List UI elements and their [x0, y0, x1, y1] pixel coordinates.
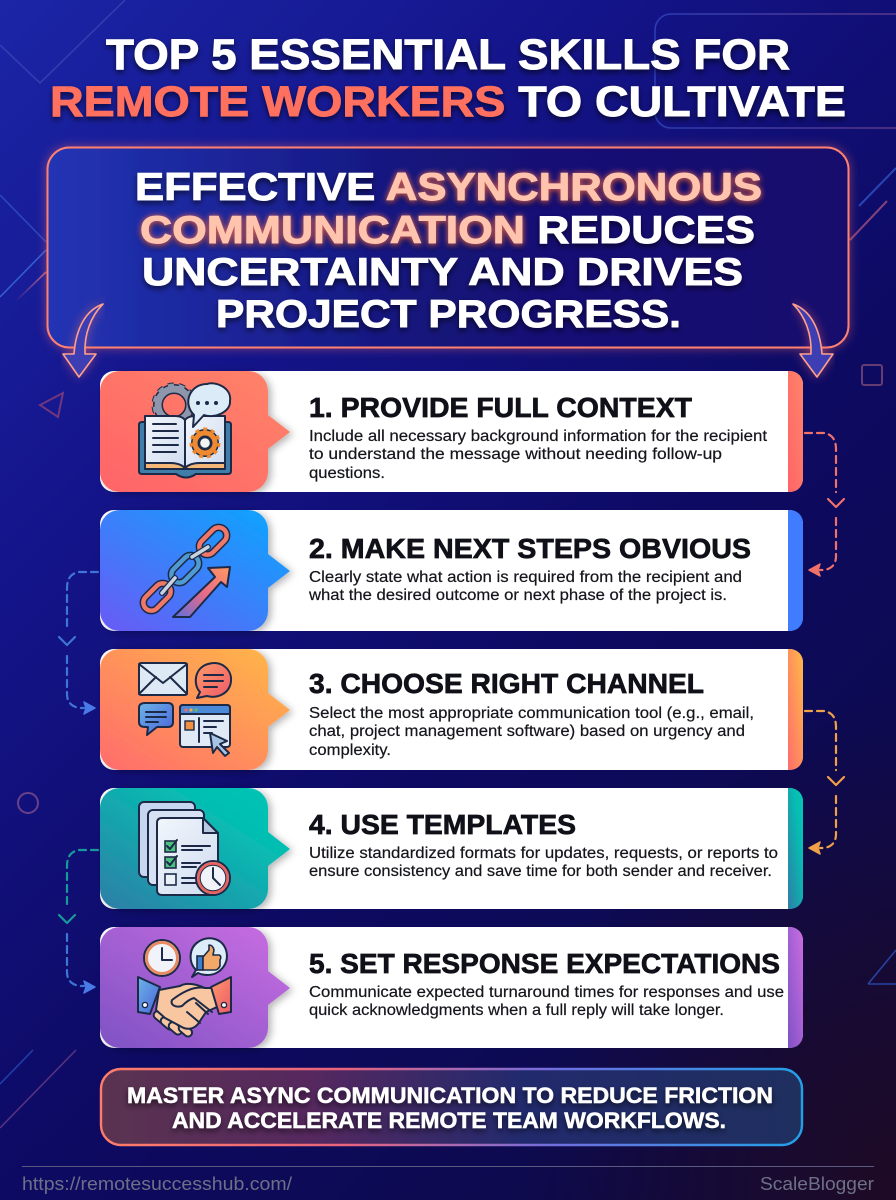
key message text: UNCERTAINTY AND DRIVES: [142, 251, 743, 294]
key message text: COMMUNICATION REDUCES: [140, 209, 755, 252]
card 5 description: [309, 984, 784, 1019]
closing message text: [127, 1083, 773, 1133]
brand name: ScaleBlogger: [760, 1173, 874, 1194]
card 1 description: [309, 428, 768, 482]
card 2: make next steps obvious: [100, 510, 803, 631]
title: [50, 31, 846, 126]
connector: card 4 to 5: [59, 850, 98, 993]
icon: checklist documents and clock: [139, 802, 230, 895]
connector: card 3 to 4: [805, 711, 844, 854]
arrow: right curved: [793, 304, 833, 377]
title: REMOTE WORKERS TO CULTIVATE: [50, 78, 846, 126]
card 1 description: to understand the message without needing follow-up: [309, 446, 722, 463]
footer: [22, 1166, 874, 1194]
closing message text: MASTER ASYNC COMMUNICATION TO REDUCE FRICTION: [127, 1083, 773, 1108]
icon: clock, thumbs up and handshake: [138, 938, 231, 1038]
key message text: PROJECT PROGRESS.: [216, 293, 681, 336]
card 3: choose right channel: [100, 649, 803, 770]
card 4 description: ensure consistency and save time for both sender and receiver.: [309, 863, 772, 880]
card 4: use templates: [100, 788, 803, 909]
connector: card 2 to 3: [59, 572, 98, 714]
icon: chain and rising arrow: [140, 524, 230, 617]
card 3 description: complexity.: [309, 742, 391, 759]
card 4 description: Utilize standardized formats for updates, requests, or reports to: [309, 845, 778, 862]
card 1: provide full context: [100, 371, 803, 492]
card 3 heading: 3. CHOOSE RIGHT CHANNEL: [309, 668, 704, 699]
panel: key message: [48, 148, 848, 348]
card 1 description: Include all necessary background information for the recipient: [309, 428, 768, 445]
card 3 description: chat, project management software) based on urgency and: [309, 723, 745, 740]
card 2 heading: 2. MAKE NEXT STEPS OBVIOUS: [309, 533, 751, 564]
card 5: set response expectations: [100, 927, 803, 1048]
closing message text: AND ACCELERATE REMOTE TEAM WORKFLOWS.: [172, 1108, 726, 1133]
card 3 description: Select the most appropriate communication tool (e.g., email,: [309, 705, 754, 722]
key message text: [135, 166, 762, 336]
card 5 heading: 5. SET RESPONSE EXPECTATIONS: [309, 948, 780, 979]
arrow: left curved: [63, 304, 103, 377]
title: TOP 5 ESSENTIAL SKILLS FOR: [106, 31, 790, 79]
card 2 description: what the desired outcome or next phase of the project is.: [308, 587, 727, 604]
card 5 description: Communicate expected turnaround times for responses and use: [309, 984, 784, 1001]
card 1 description: questions.: [309, 465, 385, 482]
connector: card 1 to 2: [805, 433, 844, 576]
card 3 description: [309, 705, 754, 759]
card 4 heading: 4. USE TEMPLATES: [309, 809, 576, 840]
icon: envelope, chat bubbles and browser window: [139, 663, 231, 756]
card 1 heading: 1. PROVIDE FULL CONTEXT: [309, 392, 692, 423]
icon: book, gear and speech bubble: [139, 383, 231, 478]
card 2 description: Clearly state what action is required from the recipient and: [309, 569, 742, 586]
key message text: EFFECTIVE ASYNCHRONOUS: [135, 166, 762, 209]
card 4 description: [309, 845, 778, 880]
callout: closing message: [101, 1069, 802, 1145]
source url: https://remotesuccesshub.com/: [22, 1173, 293, 1194]
card 5 description: quick acknowledgments when a full reply will take longer.: [309, 1002, 724, 1019]
card 2 description: [308, 569, 742, 604]
